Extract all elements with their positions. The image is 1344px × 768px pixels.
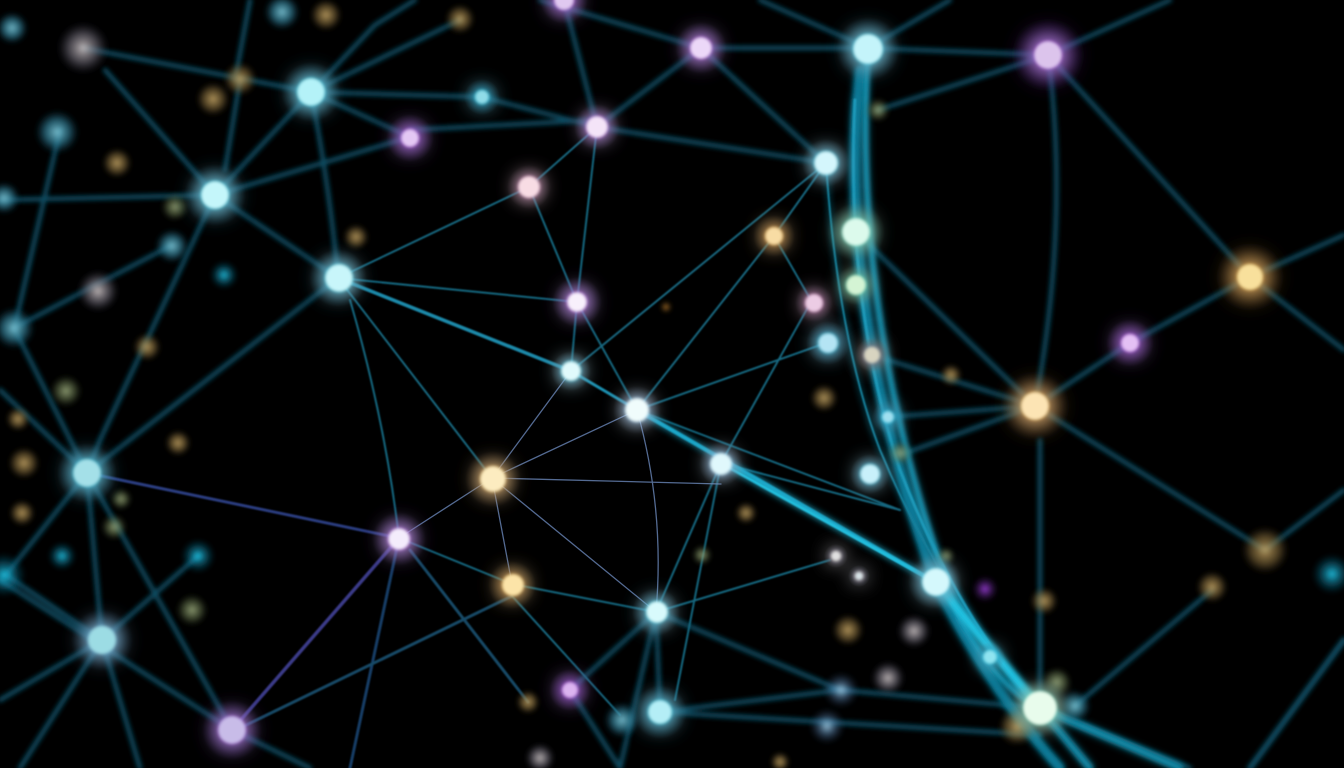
sharp mid-ground edges — [87, 127, 900, 768]
thick cyan bundle — [637, 50, 1180, 768]
bright nodes: purple — [202, 0, 1154, 760]
fine pale central edges — [399, 371, 721, 612]
bright nodes: amber and pink — [465, 165, 1284, 609]
bright nodes: green and white — [824, 203, 1070, 738]
bright nodes: cyan — [57, 17, 1005, 739]
